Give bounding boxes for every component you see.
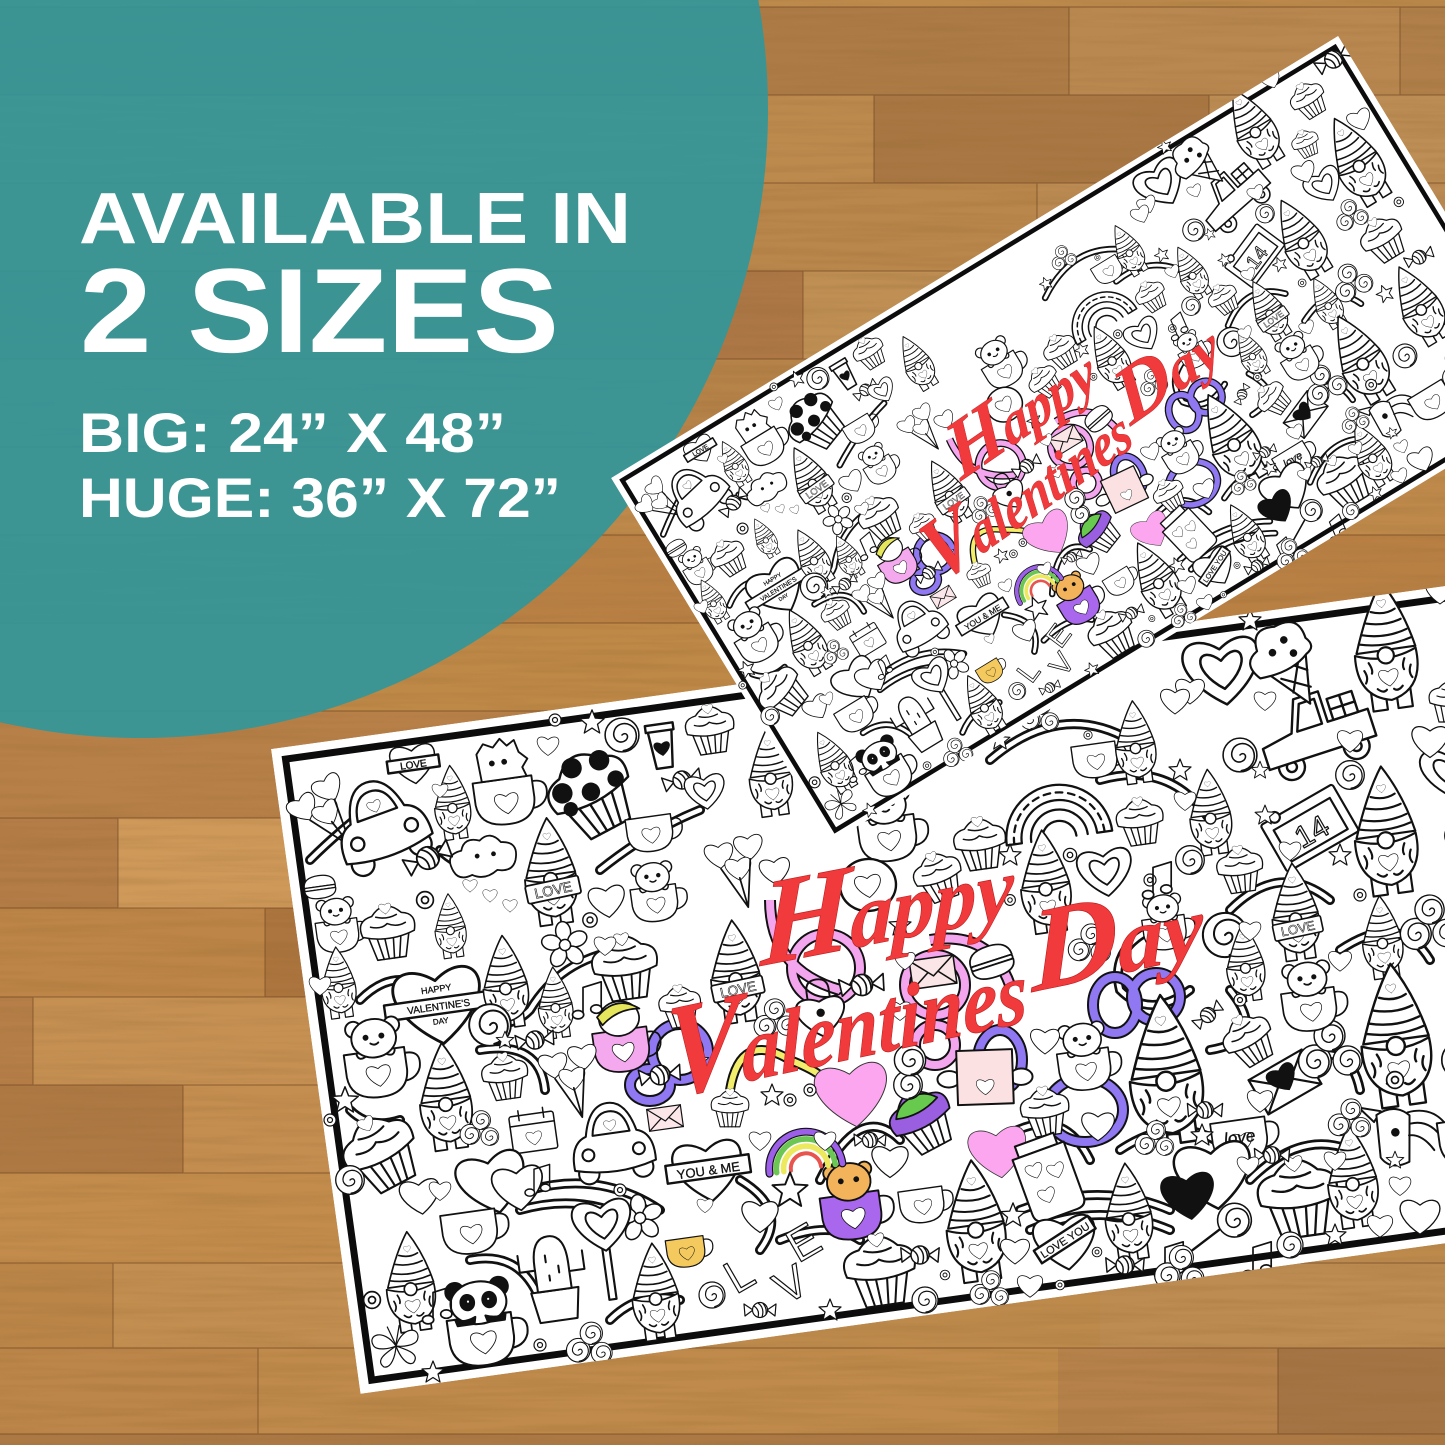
icon: melting cupcake [588,929,662,1004]
icon: off-page heart [1418,745,1445,802]
icon: gnome top [1345,578,1424,713]
doodle icons [282,578,1445,1382]
icon: cloud [447,832,519,881]
icon: striped heart [1156,1139,1257,1223]
icon: speech heart [837,855,899,915]
heading line: available in: AVAILABLE IN [79,179,631,259]
icon: mug [625,812,685,854]
swirling ribbon bands [310,724,1430,1320]
small filler hearts, stars and rings [309,579,1445,1382]
icon: flower [612,1191,668,1245]
lettering: Happy: Happy [759,805,1016,993]
icon: hedgehog mug [467,733,551,828]
lettering: Valentines: Valentines [664,902,1029,1127]
icon: gnome with heart [1345,763,1424,898]
icon: ribbon heart: VALENTINE'S [407,998,471,1017]
icon: mug [440,1207,512,1257]
icon: heart ring [683,773,727,812]
icon: gnome with hearts [412,1040,477,1153]
icon: cherry cupcake [331,1101,431,1201]
icon: car [323,767,439,881]
icon: heart flower [587,884,627,920]
icon: cherries hearts [398,1178,442,1217]
icon: colored rainbow [764,1127,842,1174]
icon: cupcake zigzag [951,813,1010,873]
icon: gnome [379,1229,440,1334]
icon: double hearts [452,1147,533,1221]
icon: bear mug [627,858,690,924]
icon: cat mug [312,895,370,955]
icon: pot [758,857,792,887]
title lettering: Happy Valentines Day [664,805,1206,1127]
icon: heart cluster [282,771,372,865]
icon: tiny gnome [430,892,469,960]
icon: gnome [1220,921,1269,1004]
icon: beetle car [566,1097,658,1186]
icon: gnome [533,965,577,1040]
icon: gnome love [1264,860,1327,963]
icon: duck mug [1139,891,1198,953]
icon: candy [661,766,703,794]
icon: macaron [303,873,337,900]
icon: envelope black heart [1249,1050,1321,1114]
icon: cupcake bow [1214,842,1266,895]
icon: love heart banner [385,742,442,787]
icon: gnome with love sign [516,815,585,928]
icon: heart lollipop [570,1197,642,1303]
icon: calendar fourteen [1258,779,1359,872]
icon: mouse mug [1053,1019,1125,1093]
icon: heart jar [1008,1130,1087,1224]
icon: yellow cat mug [665,1234,715,1270]
pink and purple loops behind lettering [630,900,1180,1142]
icon: love letters: V [764,1254,817,1314]
panel: huge poster [271,570,1445,1394]
icon: big cupcake [1253,1151,1343,1242]
icon: striped cat mug [853,782,932,865]
icon: mug with hearts [1071,740,1129,781]
icon: swirl lollipop [1187,1201,1255,1250]
icon: ice cream [1237,612,1337,720]
icon: candy [401,838,455,878]
poster paper and border [271,570,1445,1394]
icon: gnome [625,1241,684,1343]
icon: heart [490,1164,547,1214]
icon: gnome with gift [316,945,360,1020]
icon: flower [537,918,593,972]
icon: cupcake [907,844,970,907]
icon: truck [1251,678,1382,786]
icon: gnome [1183,767,1236,857]
icon: pink envelope heart [909,955,957,989]
icon: cactus in pot [515,1232,591,1325]
icon: swirl cluster [1293,1016,1364,1082]
icon: pink envelope [647,1105,683,1131]
icon: love you heart [1030,1213,1101,1274]
icon: gnome [476,933,533,1031]
teal circle panel [0,0,768,738]
icon: striped gnome [937,1157,1012,1285]
icon: gnome with gift [1098,1161,1157,1263]
heading: available in 2 sizes [79,179,631,529]
icon: heart balloons [537,1044,605,1122]
icon: butterfly [370,1323,422,1369]
icon: purple cupcake [880,1079,964,1162]
icon: gnome [1109,699,1160,786]
icon: gnome [1356,894,1407,981]
icon: cupcake [357,900,419,962]
icon: you and me banner [663,1137,754,1207]
icon: striped mug [898,1185,956,1226]
icon: frosted cupcake [840,1229,921,1310]
icon: monkey mug [339,1013,424,1101]
icon: calendar [508,1106,558,1154]
icon: off-page mug [1437,1113,1445,1169]
icon: large gnome [1118,991,1210,1149]
icon: swirl [1395,891,1445,953]
icon: swirl ring [467,1002,513,1048]
icon: panda mug [442,1274,532,1370]
icon: dog mug [1277,957,1351,1034]
icon: love letters: L [715,1246,763,1303]
size line: huge: HUGE: 36” X 72” [79,466,561,529]
icon: love you heart: LOVE YOU [1039,1221,1092,1261]
icon: unicorn pink mug [588,996,664,1075]
icon: love mug: love [1222,1125,1257,1149]
icon: cupcake [479,1049,531,1102]
icon: candy [515,1028,555,1052]
icon: heart with leaves [1075,846,1136,900]
icon: ribbon heart: DAY [432,1016,450,1027]
panel: big poster [565,13,1445,865]
icon: coffee cup [645,722,679,770]
icon: small gnome [429,763,474,841]
icon: cupcake [1114,794,1167,848]
icon: love letters: E [777,1212,830,1272]
icon: cupcake [1214,1004,1283,1073]
icon: moon [697,1280,727,1310]
lettering: Day: Day [1027,849,1206,1018]
icon: winged postcard [936,1048,1033,1106]
heading line: 2 sizes: 2 SIZES [80,244,559,378]
icon: black dotted cupcake [536,738,648,849]
icon: gnome [742,725,797,818]
icon: dotted gnome [1013,827,1076,936]
icon: cupcake [683,701,738,757]
icon: pink heart balloon [812,1060,893,1132]
icon: cupcake [1018,1083,1073,1139]
icon: macaron [966,940,1017,983]
icon: heart lollipop [1180,635,1265,710]
size line: big: BIG: 24” X 48” [79,401,506,464]
icon: gnome cropped [1350,960,1438,1110]
icon: ribbon heart: HAPPY [420,982,452,996]
icon: love mug [1210,1115,1282,1165]
icon: swirl e [1200,910,1250,960]
icon: you and me banner: YOU & ME [676,1159,741,1182]
icon: rainbow [999,778,1112,845]
icon: pink heart balloon two [966,1125,1031,1182]
icon: unicorn [1359,1096,1445,1170]
icon: love letters [715,1208,845,1333]
icon: love heart banner: LOVE [400,758,428,773]
icon: balloons [703,834,771,912]
icon: tiger purple mug [815,1158,898,1243]
icon: gnome [1320,1122,1383,1231]
icon: ribbon heart [380,963,497,1051]
